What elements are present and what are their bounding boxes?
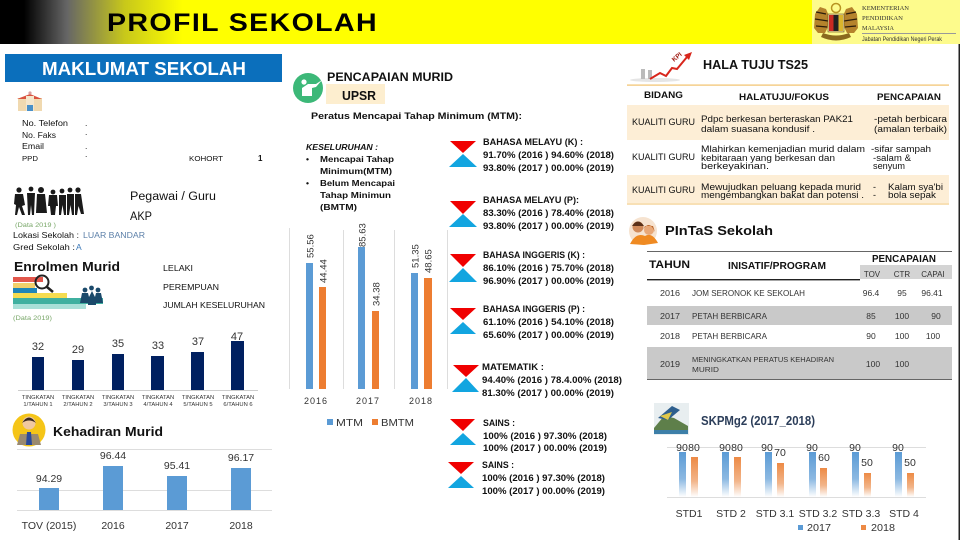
school location and grade: Gred Sekolah : xyxy=(13,242,75,252)
bar chart: attendance: 94.29 xyxy=(36,473,62,485)
subject: bahasa inggeris K xyxy=(449,250,614,286)
subject: matematik: 94.40% (2016 ) 78.4.00% (2018) xyxy=(482,375,622,385)
icon: staff silhouettes xyxy=(14,187,84,215)
overall note: (BMTM) xyxy=(320,202,357,212)
table: hala tuju: kebitaraan yang berkesan dan xyxy=(701,153,835,163)
table: hala tuju: -salam & xyxy=(873,153,911,163)
table: pintas: CTR xyxy=(894,270,910,279)
table: hala tuju: senyum xyxy=(873,161,905,171)
table: pintas: 90 xyxy=(931,311,941,321)
table: hala tuju: -sifar sampah xyxy=(871,144,931,154)
subject: bahasa melayu P: 83.30% (2016 ) 78.40% (2018) xyxy=(483,208,614,218)
icon: SKPMg2 badge xyxy=(654,403,689,435)
bar chart: skpmg2: 60 xyxy=(818,452,830,464)
table: pintas: 90 xyxy=(866,331,876,341)
table: pintas: TOV xyxy=(864,270,881,279)
bar chart: skpmg2: 50 xyxy=(904,457,916,469)
school contact details: Email xyxy=(22,141,44,151)
bar chart: enrolment by year: TINGKATAN xyxy=(142,395,174,401)
bar chart: enrolment by year: 1/TAHUN 1 xyxy=(23,402,53,408)
bar chart: attendance: 2018 xyxy=(229,520,253,532)
school contact details xyxy=(22,118,263,163)
bar chart: enrolment by year: 2/TAHUN 2 xyxy=(63,402,93,408)
bar chart: skpmg2: 80 xyxy=(731,442,743,454)
subject: bahasa melayu P xyxy=(449,195,614,231)
table: hala tuju: dalam suasana kondusif . xyxy=(701,124,815,134)
panel: pencapaian murid heading: UPSR xyxy=(342,88,377,103)
enrolment labels: PEREMPUAN xyxy=(163,282,219,292)
table: hala tuju: HALATUJU/FOKUS xyxy=(739,92,829,103)
table: pintas: 100 xyxy=(895,359,909,369)
subject: sains 1: SAINS : xyxy=(483,418,515,428)
school contact details: PPD xyxy=(22,156,38,163)
staff labels xyxy=(130,191,216,223)
school contact details: No. Telefon xyxy=(22,118,68,128)
table: pintas: 96.4 xyxy=(863,288,880,298)
subject: bahasa inggeris P: BAHASA INGGERIS (P) : xyxy=(483,304,585,314)
school contact details: No. Faks xyxy=(22,130,56,140)
table: hala tuju: bola sepak xyxy=(888,190,937,200)
table: pintas: PENCAPAIAN xyxy=(872,254,936,265)
bar chart: enrolment by year: 32 xyxy=(32,341,44,353)
table: hala tuju: (amalan terbaik) xyxy=(874,124,947,134)
table: pintas: JOM SERONOK KE SEKOLAH xyxy=(692,289,805,298)
bar chart: enrolment by year: 4/TAHUN 4 xyxy=(143,402,173,408)
table: hala tuju: Pdpc berkesan berteraskan PAK21 xyxy=(701,114,853,124)
bar chart: skpmg2: 90 xyxy=(719,442,731,454)
panel: maklumat sekolah heading xyxy=(5,54,282,82)
subject: bahasa melayu K xyxy=(449,137,614,173)
subject: sains 2: 100% (2017 ) 00.00% (2019) xyxy=(482,486,605,496)
bar chart: enrolment by year: 29 xyxy=(72,344,84,356)
heading: kehadiran murid: Kehadiran Murid xyxy=(53,424,163,439)
table: hala tuju: - xyxy=(873,190,876,200)
table: pintas: 100 xyxy=(895,331,909,341)
bar chart: skpmg2: 90 xyxy=(806,442,818,454)
subject: sains 2: 100% (2016 ) 97.30% (2018) xyxy=(482,473,605,483)
bar chart: skpmg2: STD1 xyxy=(676,508,703,520)
table: pintas: 100 xyxy=(866,359,880,369)
bar chart: MTM vs BMTM: 51.35 xyxy=(410,244,422,268)
subject: sains 2: SAINS : xyxy=(482,460,514,470)
table: hala tuju: mengembangkan bakat dan potensi . xyxy=(701,190,864,200)
table: pintas: MENINGKATKAN PERATUS KEHADIRAN xyxy=(692,355,834,364)
bar chart: skpmg2: 90 xyxy=(676,442,688,454)
bar chart: enrolment by year: TINGKATAN xyxy=(62,395,94,401)
subject: sains 1: 100% (2017 ) 00.00% (2019) xyxy=(483,443,607,453)
table: pintas: 2017 xyxy=(660,312,681,321)
ministry logo: PENDIDIKAN xyxy=(862,15,903,22)
chart legend: 2018 xyxy=(871,522,895,534)
bar chart: enrolment by year: 47 xyxy=(231,331,243,343)
panel: pencapaian murid heading xyxy=(293,70,453,104)
subject: sains 1 xyxy=(450,418,607,453)
bar chart: skpmg2: 90 xyxy=(849,442,861,454)
bar chart: MTM vs BMTM: 2018 xyxy=(409,396,433,406)
bar chart: attendance xyxy=(17,449,272,532)
table: pintas: 100 xyxy=(926,331,940,341)
bar chart: enrolment by year: 6/TAHUN 6 xyxy=(223,402,253,408)
subject: bahasa inggeris P xyxy=(450,304,614,340)
table: hala tuju: KUALITI GURU xyxy=(632,185,695,195)
bar chart: MTM vs BMTM: 48.65 xyxy=(424,249,434,273)
bar chart: MTM vs BMTM: 85.63 xyxy=(358,223,368,247)
chart legend: 2017 xyxy=(807,522,831,534)
bar chart: enrolment by year: 35 xyxy=(112,338,124,350)
table: pintas: 96.41 xyxy=(921,288,943,298)
bar chart: skpmg2: 90 xyxy=(892,442,904,454)
enrolment labels: LELAKI xyxy=(163,263,193,273)
subject: bahasa inggeris K: BAHASA INGGERIS (K) : xyxy=(483,250,585,260)
panel: maklumat sekolah heading: MAKLUMAT SEKOLAH xyxy=(42,59,246,79)
bar chart: attendance: 2016 xyxy=(101,520,125,532)
icon: KPI arrow: KPI xyxy=(671,51,684,64)
table: pintas: TAHUN xyxy=(649,259,690,271)
table: pintas: CAPAI xyxy=(921,270,945,279)
bar chart: skpmg2: 80 xyxy=(688,442,700,454)
school contact details: . xyxy=(85,149,87,159)
bar chart: skpmg2: STD 3.3 xyxy=(842,508,880,520)
bar chart: attendance: 96.44 xyxy=(100,450,126,462)
bar chart: skpmg2: STD 3.1 xyxy=(756,508,794,520)
bar chart: skpmg2: 70 xyxy=(774,447,786,459)
bar chart: MTM vs BMTM: 34.38 xyxy=(372,282,382,306)
chart legend xyxy=(798,522,895,534)
ministry logo: Jabatan Pendidikan Negeri Perak xyxy=(862,36,943,43)
school contact details: 1 xyxy=(258,154,263,163)
overall note: KESELURUHAN : xyxy=(306,143,378,152)
school contact details: . xyxy=(85,127,87,137)
subject: bahasa inggeris P: 65.60% (2017 ) 00.00% (2019) xyxy=(483,330,614,340)
subheading: peratus: Peratus Mencapai Tahap Minimum (MTM): xyxy=(311,111,522,122)
heading: enrolmen murid: Enrolmen Murid xyxy=(14,259,120,274)
table: hala tuju: PENCAPAIAN xyxy=(877,92,941,103)
bar chart: attendance: 96.17 xyxy=(228,452,254,464)
table: hala tuju: BIDANG xyxy=(644,90,683,101)
table: pintas: INISATIF/PROGRAM xyxy=(728,261,826,272)
panel: pencapaian murid heading: PENCAPAIAN MURID xyxy=(327,70,453,84)
icon: student avatar xyxy=(12,414,46,446)
enrolment labels xyxy=(163,263,265,310)
bar chart: enrolment by year: TINGKATAN xyxy=(22,395,54,401)
subject: bahasa inggeris P: 61.10% (2016 ) 54.10% (2018) xyxy=(483,317,614,327)
table: pintas: 95 xyxy=(897,288,907,298)
bar chart: enrolment by year: TINGKATAN xyxy=(102,395,134,401)
subject: sains 2 xyxy=(448,460,605,496)
table: pintas: 85 xyxy=(866,311,876,321)
bar chart: skpmg2: STD 2 xyxy=(716,508,746,520)
chart legend xyxy=(327,418,414,429)
bar chart: skpmg2: STD 4 xyxy=(889,508,919,520)
school location and grade: LUAR BANDAR xyxy=(83,231,145,240)
overall note: • xyxy=(306,178,309,188)
bar chart: MTM vs BMTM: 2017 xyxy=(356,396,380,406)
bar chart: attendance: TOV (2015) xyxy=(22,520,76,532)
table: pintas: 100 xyxy=(895,311,909,321)
subject: matematik: 81.30% (2017 ) 00.00% (2019) xyxy=(482,388,614,398)
icon: school building xyxy=(17,91,42,111)
subject: bahasa melayu K: 91.70% (2016 ) 94.60% (2018) xyxy=(483,150,614,160)
heading: pintas sekolah: PInTaS Sekolah xyxy=(665,223,773,238)
school contact details: . xyxy=(85,141,87,151)
overall note: Tahap Minimun xyxy=(320,190,391,200)
chart legend: MTM xyxy=(336,418,363,429)
table: pintas: PETAH BERBICARA xyxy=(692,312,768,321)
bar chart: enrolment by year: 37 xyxy=(192,336,204,348)
subject: bahasa melayu P: BAHASA MELAYU (P): xyxy=(483,195,579,205)
chart legend: BMTM xyxy=(381,418,414,429)
overall note: Minimum(MTM) xyxy=(320,166,392,176)
table: pintas: MURID xyxy=(692,365,720,374)
title: PROFIL SEKOLAH xyxy=(107,9,378,37)
subject: bahasa melayu K: 93.80% (2017 ) 00.00% (2019) xyxy=(483,163,614,173)
header band xyxy=(0,0,960,44)
icon: enrolment bars and magnifier xyxy=(13,276,103,309)
bar chart: enrolment by year: TINGKATAN xyxy=(182,395,214,401)
table: pintas: 2019 xyxy=(660,360,681,369)
bar chart: attendance: 2017 xyxy=(165,520,189,532)
heading: skpmg2: SKPMg2 (2017_2018) xyxy=(701,414,815,428)
heading: hala tuju: HALA TUJU TS25 xyxy=(703,58,808,72)
bar chart: enrolment by year: 5/TAHUN 5 xyxy=(183,402,213,408)
overall note: Mencapai Tahap xyxy=(320,154,394,164)
ministry logo: KEMENTERIAN xyxy=(862,5,909,12)
subject: matematik xyxy=(452,362,622,398)
school location and grade: A xyxy=(76,242,82,252)
table: hala tuju: Mlahirkan kemenjadian murid dalam xyxy=(701,144,865,154)
subject: sains 1: 100% (2016 ) 97.30% (2018) xyxy=(483,431,607,441)
school location and grade xyxy=(13,222,145,252)
subject: bahasa inggeris K: 86.10% (2016 ) 75.70% (2018) xyxy=(483,263,614,273)
table: hala tuju: KUALITI GURU xyxy=(632,117,695,127)
ministry logo: MALAYSIA xyxy=(862,25,894,32)
table: hala tuju: - xyxy=(873,182,876,192)
overall note xyxy=(306,143,395,212)
table: pintas: 2016 xyxy=(660,289,681,298)
bar chart: MTM vs BMTM xyxy=(289,223,448,429)
table: hala tuju: Mewujudkan peluang kepada murid xyxy=(701,182,861,192)
ministry logo xyxy=(812,0,960,44)
subject: bahasa inggeris K: 96.90% (2017 ) 00.00% (2019) xyxy=(483,276,614,286)
bar chart: skpmg2: STD 3.2 xyxy=(799,508,837,520)
bar chart: MTM vs BMTM: 2016 xyxy=(304,396,328,406)
bar chart: MTM vs BMTM: 44.44 xyxy=(318,259,330,283)
subject: matematik: MATEMATIK : xyxy=(482,362,544,372)
overall note: • xyxy=(306,154,309,164)
table: hala tuju: -petah berbicara xyxy=(874,114,947,124)
table: pintas xyxy=(647,251,952,380)
table: pintas: PETAH BERBICARA xyxy=(692,332,768,341)
school contact details: . xyxy=(85,118,87,128)
data year note: (Data 2019) xyxy=(13,315,52,322)
table: hala tuju: Kalam sya'bi xyxy=(888,182,943,192)
school contact details: KOHORT xyxy=(189,154,223,163)
overall note: Belum Mencapai xyxy=(320,178,395,188)
school location and grade: (Data 2019 ) xyxy=(15,222,56,229)
table: pintas: 2018 xyxy=(660,332,681,341)
enrolment labels: JUMLAH KESELURUHAN xyxy=(163,300,265,310)
subject: bahasa melayu K: BAHASA MELAYU (K) : xyxy=(483,137,583,147)
subject: bahasa melayu P: 93.80% (2017 ) 00.00% (2019) xyxy=(483,221,614,231)
table: hala tuju: KUALITI GURU xyxy=(632,152,695,162)
icon: KPI arrow xyxy=(630,51,692,82)
bar chart: skpmg2: 90 xyxy=(761,442,773,454)
bar chart: attendance: 95.41 xyxy=(164,460,190,472)
table: hala tuju: berkeyakinan. xyxy=(701,161,769,171)
staff labels: AKP xyxy=(130,211,152,223)
bar chart: enrolment by year: 33 xyxy=(152,340,164,352)
icon: pintas people xyxy=(629,217,658,245)
staff labels: Pegawai / Guru xyxy=(130,191,216,203)
table: hala tuju xyxy=(627,84,949,204)
bar chart: skpmg2 xyxy=(667,442,926,534)
bar chart: enrolment by year: TINGKATAN xyxy=(222,395,254,401)
school location and grade: Lokasi Sekolah : xyxy=(13,230,79,240)
bar chart: MTM vs BMTM: 55.56 xyxy=(306,234,316,258)
bar chart: skpmg2: 50 xyxy=(861,457,873,469)
bar chart: enrolment by year xyxy=(18,331,258,408)
bar chart: enrolment by year: 3/TAHUN 3 xyxy=(103,402,133,408)
